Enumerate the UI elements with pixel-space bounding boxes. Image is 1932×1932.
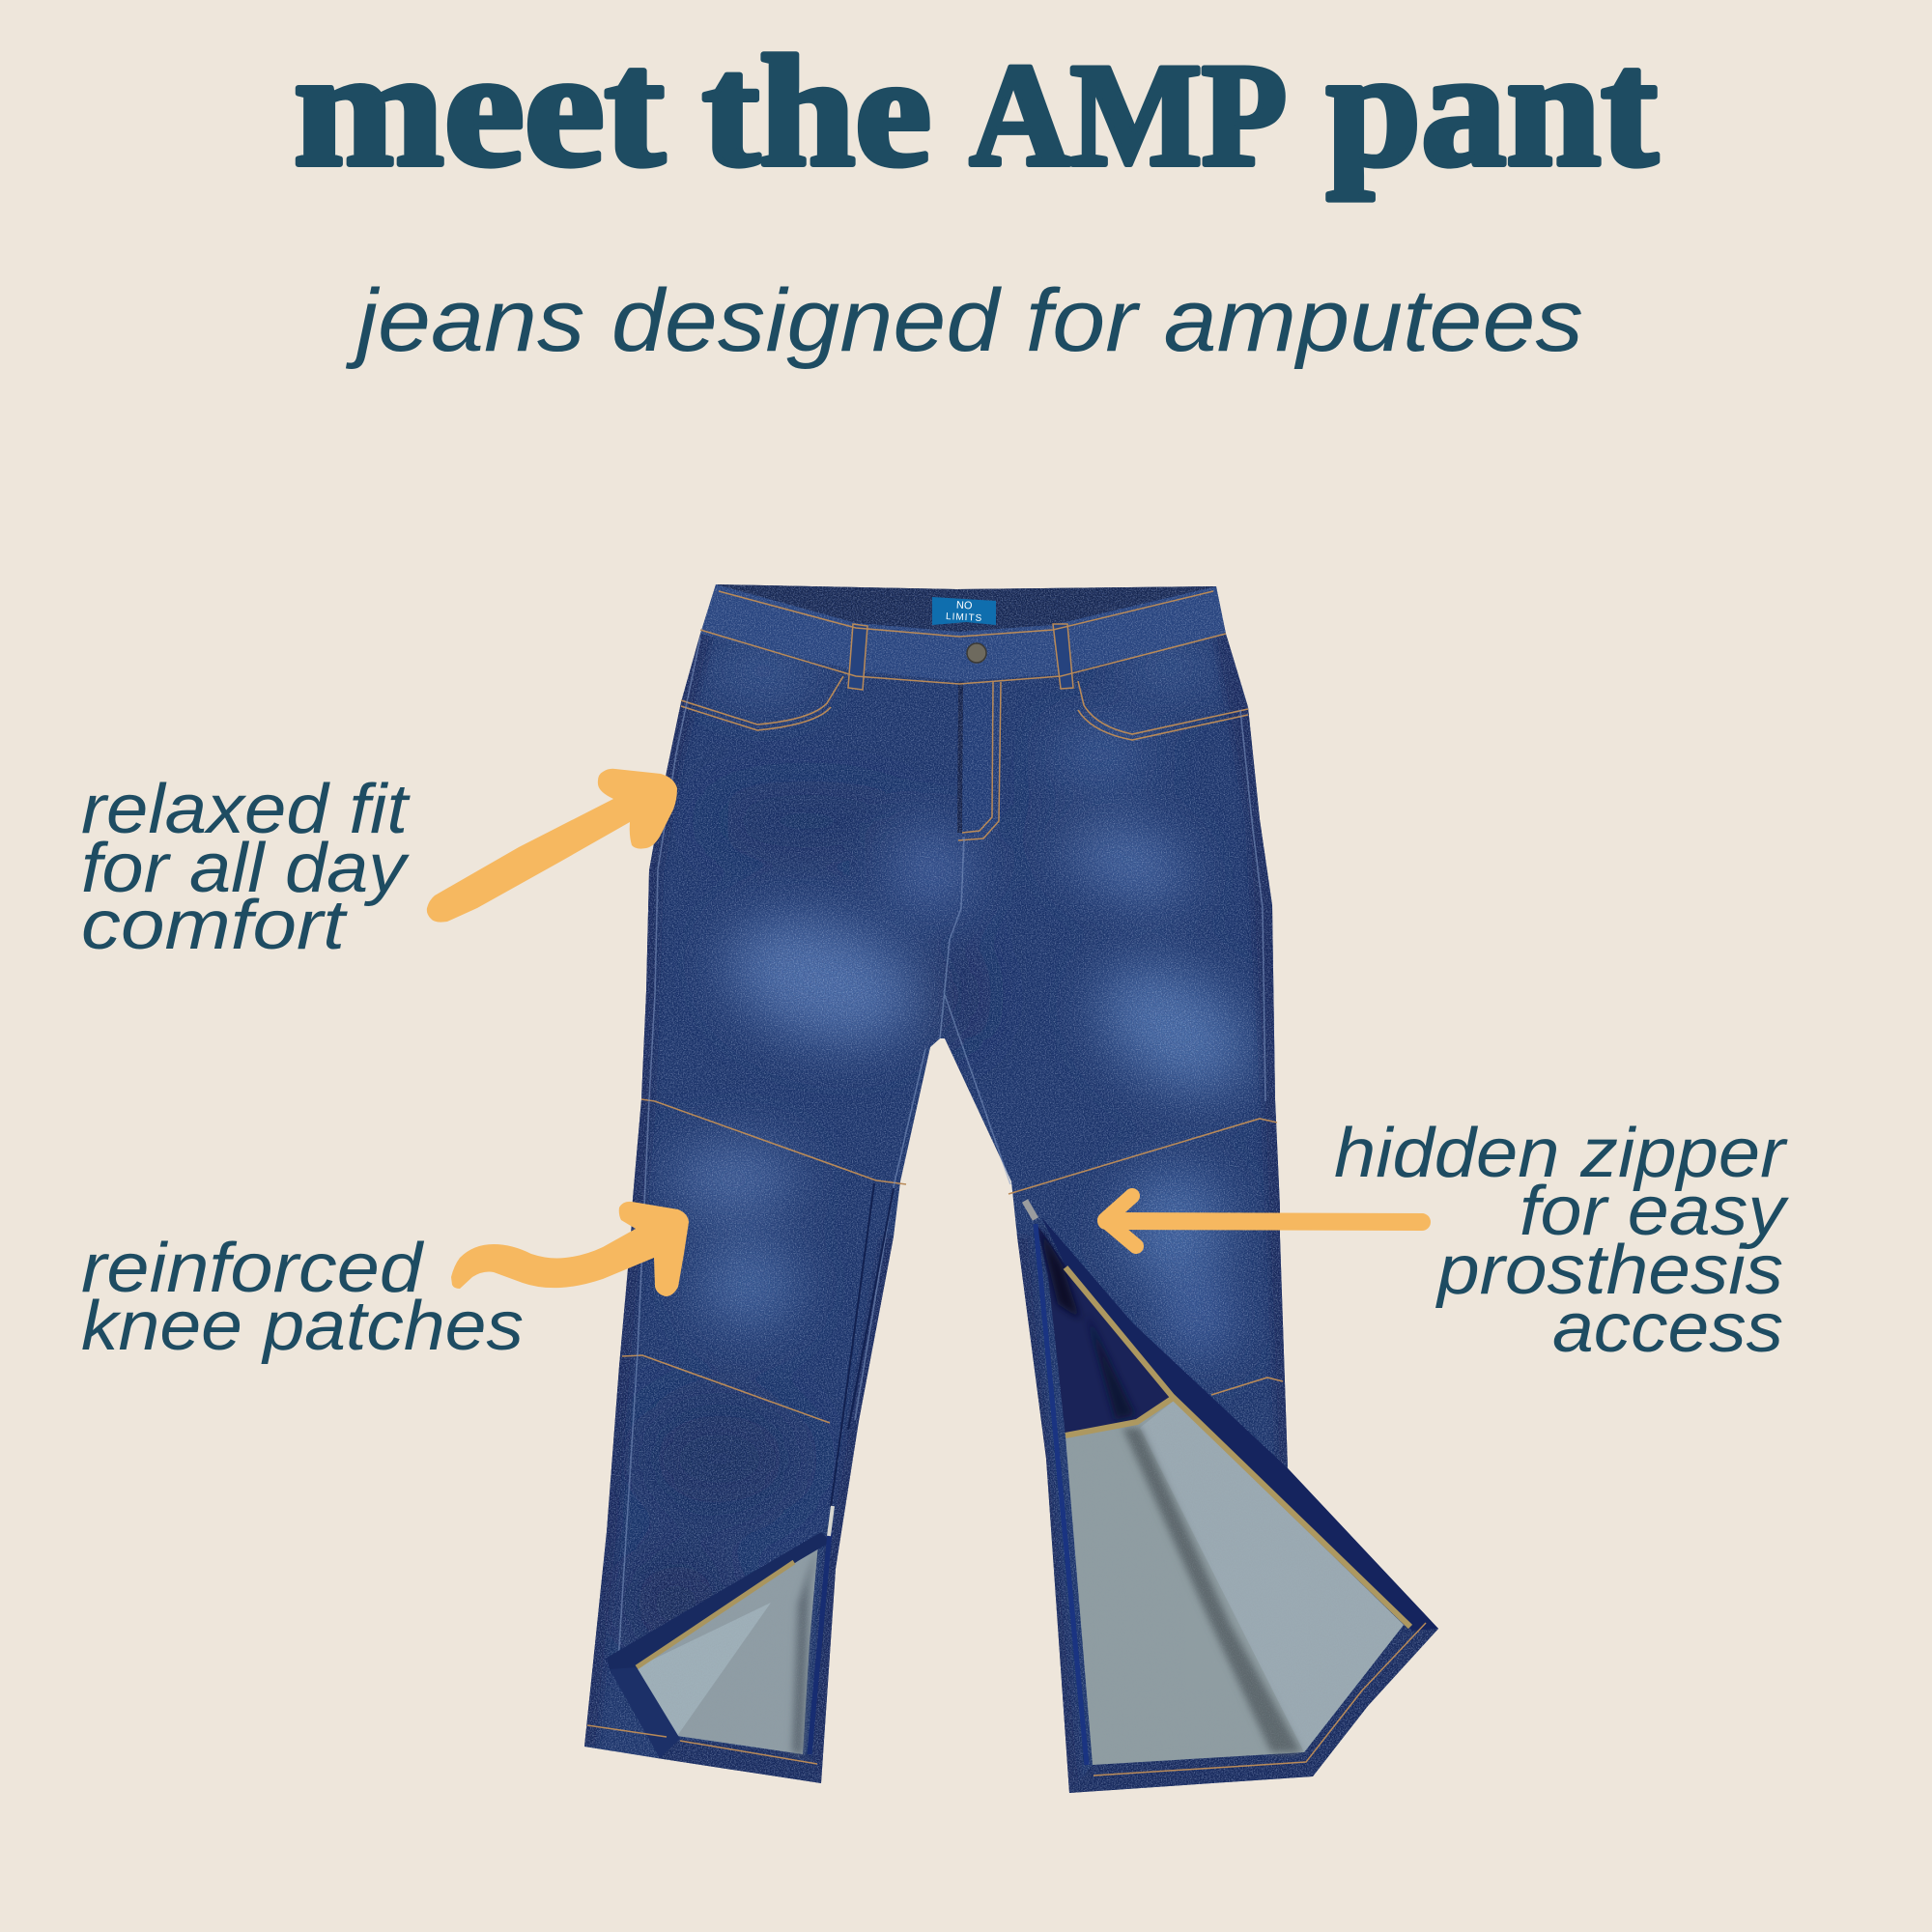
dark side edges (584, 634, 1290, 1793)
tan seam (1065, 1267, 1410, 1627)
back waistband (716, 584, 1216, 632)
left leg opening (607, 1506, 833, 1763)
front waistband (700, 584, 1226, 681)
pockets (681, 676, 1248, 740)
label: reinforced knee patches: knee patches (81, 1288, 524, 1365)
arrow: reinforced knee patches (451, 1202, 689, 1296)
arrow: relaxed fit (427, 769, 677, 923)
label: hidden zipper: hidden zipper (1334, 1115, 1788, 1192)
hem stitching (587, 1623, 1426, 1776)
title (294, 17, 1658, 201)
right zip strip (1036, 1224, 1087, 1765)
jeans photo (570, 570, 1449, 1806)
left lining texture (711, 1594, 809, 1749)
title: pant (1326, 17, 1658, 201)
label: reinforced knee patches (81, 1230, 524, 1365)
zipper pull (829, 1506, 833, 1536)
label: relaxed fit: relaxed fit (81, 771, 411, 848)
label: No Limits: NO (956, 600, 973, 611)
side and crotch seams (618, 638, 1265, 1662)
label: hidden zipper: access (1552, 1290, 1783, 1367)
arrow: hidden zipper (1105, 1196, 1422, 1246)
button (967, 643, 986, 663)
left zip strip (810, 1532, 830, 1754)
fly panel (962, 681, 1000, 825)
title: the (702, 24, 931, 199)
label: No Limits (932, 597, 996, 625)
label: reinforced knee patches: reinforced (81, 1230, 424, 1307)
waistband stitching (700, 591, 1226, 684)
right leg opening (1025, 1201, 1438, 1768)
lower denim hems (1069, 1625, 1438, 1793)
label: relaxed fit (81, 771, 411, 964)
grain texture (570, 570, 1449, 1806)
fold shadow (1122, 1428, 1301, 1752)
fly stitching (958, 682, 1001, 840)
title: meet (294, 17, 665, 201)
label: relaxed fit: for all day (81, 830, 410, 907)
left flap hem (610, 1667, 680, 1758)
left flap band (607, 1532, 831, 1669)
navy inner lining (1037, 1224, 1172, 1436)
knee seams (622, 1099, 1283, 1423)
left leg zipper line (831, 1183, 894, 1507)
label: hidden zipper: prosthesis (1435, 1232, 1783, 1309)
light wash and shadow patches (618, 645, 1271, 1662)
belt loops (848, 624, 1073, 690)
title: AMP (970, 34, 1287, 196)
zip flap band (1041, 1217, 1438, 1631)
denim body (570, 570, 1449, 1806)
left inner lining (637, 1544, 818, 1754)
lining texture (1126, 1430, 1293, 1750)
subtitle: jeans designed for amputees (345, 271, 1583, 370)
label: hidden zipper: for easy (1520, 1173, 1789, 1250)
label: No Limits: LIMITS (946, 611, 983, 624)
label: relaxed fit: comfort (81, 887, 348, 964)
grey lining (1065, 1401, 1404, 1765)
label: hidden zipper (1334, 1115, 1789, 1367)
zipper top (1025, 1201, 1036, 1219)
